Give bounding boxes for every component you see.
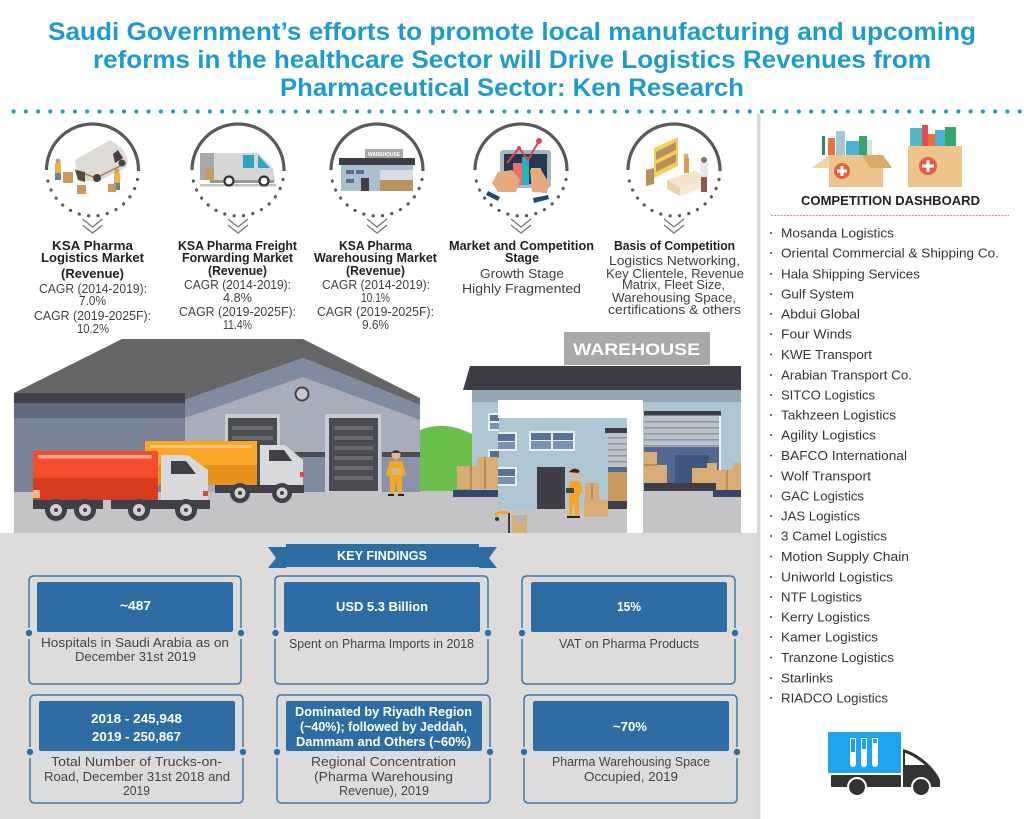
card: warehousing space: Pharma Warehousing Space: [552, 755, 710, 769]
roller door large: [644, 411, 721, 491]
list of competitors: [770, 226, 999, 706]
card: regional concentration: Regional Concentration: [311, 755, 456, 769]
card: hospitals: [26, 576, 244, 684]
heading: KSA Pharma Freight: [178, 239, 298, 253]
list of competitors: BAFCO International: [781, 448, 907, 463]
CAGR text: [317, 278, 434, 332]
card: trucks on road: 2019 - 250,867: [92, 730, 181, 744]
left warehouse: [14, 339, 420, 533]
CAGR text: 10.2%: [77, 322, 109, 336]
card: VAT: 15%: [617, 600, 641, 614]
list of competitors: Abdui Global: [781, 306, 860, 322]
list of competitors: Kamer Logistics: [781, 630, 879, 644]
list of competitors: Motion Supply Chain: [781, 549, 909, 564]
banner: key findings: KEY FINDINGS: [337, 549, 427, 563]
list of competitors: JAS Logistics: [781, 508, 860, 524]
icon: small warehouse: WAREHOUSE: [368, 152, 401, 158]
title: Pharmaceutical Sector: Ken Research: [280, 74, 744, 102]
CAGR text: CAGR (2019-2025F):: [179, 305, 296, 319]
list of competitors: Starlinks: [781, 670, 834, 686]
CAGR text: CAGR (2014-2019):: [184, 278, 291, 292]
stage text: Growth Stage: [480, 267, 564, 281]
heading: KSA Pharma: [52, 239, 134, 253]
warehouse sign: [564, 332, 710, 365]
card: hospitals: ~487: [120, 599, 151, 613]
list of competitors: Wolf Transport: [781, 468, 871, 484]
card: trucks on road: Road, December 31st 2018 and: [44, 770, 230, 784]
CAGR text: CAGR (2014-2019):: [322, 278, 430, 292]
list of competitors: Kerry Logistics: [781, 610, 871, 624]
heading: (Revenue): [61, 267, 124, 281]
card: regional concentration: (~40%); followed by Jeddah,: [300, 720, 467, 734]
stacks of boxes: [453, 452, 741, 517]
icon: delivery van with workers: [46, 124, 138, 233]
icon: small warehouse: [331, 124, 423, 233]
icon: hands holding tablet with chart: [475, 124, 567, 233]
CAGR text: [179, 278, 296, 332]
panel: KSA pharma logistics market: [34, 124, 151, 336]
list of competitors: GAC Logistics: [781, 488, 864, 504]
card: regional concentration: Revenue), 2019: [339, 784, 429, 798]
card: trucks on road: Total Number of Trucks-on-: [51, 755, 222, 769]
basis text: [606, 254, 744, 317]
heading: [314, 239, 438, 278]
CAGR text: 7.0%: [79, 294, 106, 308]
worker holding box: [386, 450, 406, 496]
list of competitors: Takhzeen Logistics: [781, 408, 897, 422]
CAGR text: 9.6%: [362, 318, 389, 332]
door: [537, 467, 565, 509]
list of competitors: Agility Logistics: [781, 428, 877, 442]
card: trucks on road: 2018 - 245,948: [91, 712, 182, 726]
card: VAT: [519, 576, 738, 684]
icon: truck with test tubes: [828, 732, 940, 797]
heading: Forwarding Market: [182, 251, 294, 265]
heading: Warehousing Market: [314, 251, 438, 265]
windows: [488, 413, 575, 486]
icon: warehouse counter scene: [628, 124, 720, 233]
list of competitors: 3 Camel Logistics: [781, 528, 888, 544]
panel: market and competition stage: [449, 124, 594, 296]
title: [48, 18, 976, 102]
white portal: [498, 400, 643, 533]
heading: Market and Competition: [449, 239, 594, 253]
heading: [178, 239, 298, 278]
heading: Basis of Competition: [614, 239, 735, 253]
heading: Logistics Market: [41, 251, 145, 265]
CAGR text: CAGR (2014-2019):: [39, 282, 147, 296]
panel: key findings background: [0, 533, 757, 819]
panel: KSA pharma warehousing market: [314, 124, 438, 332]
orange truck: [145, 441, 304, 503]
worker with clipboard: [566, 469, 583, 518]
CAGR text: CAGR (2019-2025F):: [34, 309, 151, 323]
card: regional concentration: (Pharma Warehousing: [314, 770, 453, 784]
title: Saudi Government’s efforts to promote local manufacturing and upcoming: [48, 18, 976, 46]
warehouse sign: WAREHOUSE: [573, 340, 700, 359]
card: pharma imports: Spent on Pharma Imports in 2018: [289, 637, 474, 651]
icon: freight van: [192, 124, 284, 233]
card: VAT: VAT on Pharma Products: [559, 637, 699, 651]
icon: medical supply boxes: [812, 125, 962, 187]
heading: Stage: [505, 251, 539, 265]
CAGR text: 11.4%: [223, 318, 252, 332]
red truck: [33, 451, 210, 521]
CAGR text: CAGR (2019-2025F):: [317, 305, 434, 319]
heading: [449, 239, 594, 265]
card: regional concentration: [274, 695, 493, 803]
list of competitors: Four Winds: [781, 326, 853, 342]
basis text: Logistics Networking,: [609, 254, 740, 268]
card: hospitals: Hospitals in Saudi Arabia as on: [41, 636, 229, 650]
list of competitors: Oriental Commercial & Shipping Co.: [781, 246, 999, 260]
list of competitors: Arabian Transport Co.: [781, 368, 912, 382]
card: hospitals: December 31st 2019: [75, 650, 196, 664]
heading: (Revenue): [346, 264, 405, 278]
illustration: warehouses and trucks: [14, 332, 741, 533]
list of competitors: Gulf System: [781, 286, 854, 302]
title: reforms in the healthcare Sector will Drive Logistics Revenues from: [93, 46, 931, 74]
heading: [41, 239, 145, 281]
heading: (Revenue): [208, 264, 267, 278]
list of competitors: RIADCO Logistics: [781, 690, 889, 706]
stage text: [462, 267, 581, 296]
banner: key findings: [268, 544, 497, 568]
basis text: certifications & others: [608, 303, 741, 317]
panel: KSA pharma freight forwarding market: [178, 124, 298, 332]
basis text: Matrix, Fleet Size,: [622, 278, 725, 292]
basis text: Key Clientele, Revenue: [606, 267, 744, 281]
CAGR text: 10.1%: [361, 291, 390, 305]
panel: basis of competition: [606, 124, 744, 317]
heading: COMPETITION DASHBOARD: [801, 193, 980, 208]
list of competitors: NTF Logistics: [781, 590, 863, 604]
heading: KSA Pharma: [339, 239, 413, 253]
list of competitors: Hala Shipping Services: [781, 266, 921, 282]
card: warehousing space: Occupied, 2019: [584, 770, 678, 784]
list of competitors: Uniworld Logistics: [781, 570, 894, 584]
card: pharma imports: USD 5.3 Billion: [336, 600, 428, 614]
panel: competition dashboard: [770, 125, 1009, 797]
list of competitors: Tranzone Logistics: [781, 650, 895, 665]
card: warehousing space: [521, 695, 740, 803]
card: regional concentration: Dammam and Others (~60%): [296, 735, 471, 749]
card: trucks on road: 2019: [123, 784, 150, 798]
CAGR text: 4.8%: [223, 291, 252, 305]
stage text: Highly Fragmented: [462, 282, 581, 296]
CAGR text: [34, 282, 151, 336]
list of competitors: KWE Transport: [781, 347, 872, 362]
hand truck and box: [495, 512, 527, 533]
basis text: Warehousing Space,: [612, 291, 736, 305]
card: regional concentration: Dominated by Riyadh Region: [295, 705, 472, 719]
card: pharma imports: [272, 576, 491, 684]
list of competitors: SITCO Logistics: [781, 388, 875, 402]
card: trucks on road: [27, 695, 246, 803]
list of competitors: Mosanda Logistics: [781, 226, 895, 240]
card: warehousing space: ~70%: [613, 720, 647, 734]
roller door small: [605, 428, 628, 509]
right warehouse: [420, 332, 741, 533]
